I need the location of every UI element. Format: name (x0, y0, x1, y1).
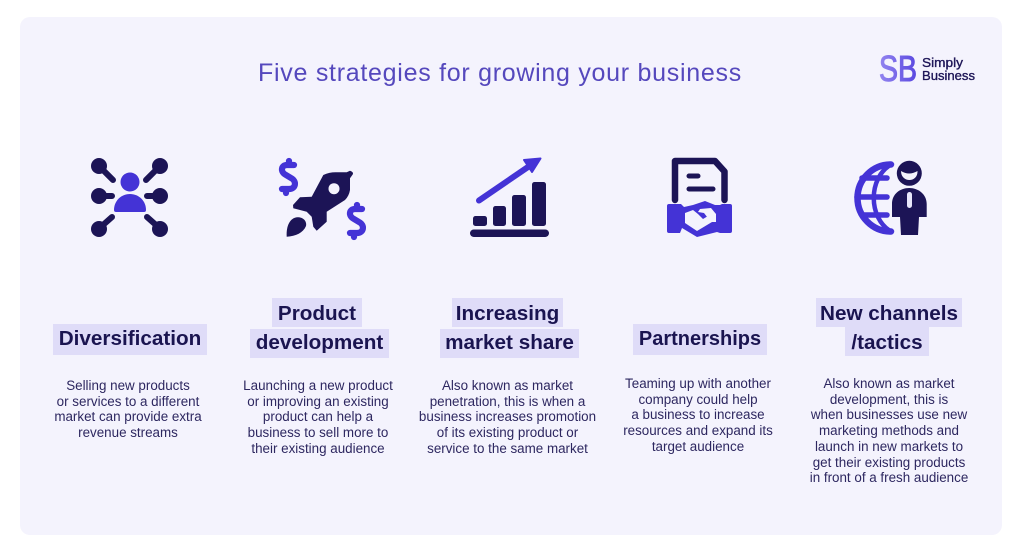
text: New channels /tactics (810, 376, 968, 485)
text: Diversification (54, 378, 202, 440)
heading line 2 (845, 327, 929, 356)
text: Diversification: market can provide extra (54, 409, 202, 424)
text: New channels /tactics: Also known as market (824, 376, 954, 391)
text: Product development: Launching a new product (243, 378, 393, 393)
heading line 2: market share (445, 331, 574, 354)
heading: Partnerships (633, 324, 767, 355)
text: Diversification: revenue streams (78, 425, 178, 440)
text: New channels /tactics: when businesses use new (811, 407, 967, 422)
heading line 1 (272, 298, 362, 327)
logo: Simply Business: Simply (922, 55, 964, 70)
text: Diversification: Selling new products (66, 378, 190, 393)
text: Partnerships: a business to increase (631, 407, 765, 422)
heading line 2: development (256, 331, 383, 354)
text: Product development: their existing audience (251, 441, 385, 456)
heading line 1: Increasing (456, 302, 559, 325)
text: Diversification: or services to a different (57, 394, 199, 409)
heading line 1: New channels (820, 302, 958, 325)
heading line 2: /tactics (851, 331, 923, 354)
text: Increasing market share: of its existing product or (437, 425, 578, 440)
text: Increasing market share: business increases promotion (419, 409, 596, 424)
text: Partnerships: Teaming up with another (625, 376, 771, 391)
text: Product development: or improving an existing (247, 394, 389, 409)
text: Product development: product can help a (263, 409, 373, 424)
heading line 1: Product (278, 302, 356, 325)
text: New channels /tactics: in front of a fresh audience (810, 470, 968, 485)
text: New channels /tactics: launch in new markets to (815, 439, 963, 454)
text: New channels /tactics: get their existing products (813, 455, 965, 470)
text: Product development (243, 378, 393, 456)
logo: Simply Business: SB (879, 48, 917, 89)
text: Increasing market share: Also known as market (442, 378, 573, 393)
heading: Increasing market share (440, 298, 579, 358)
text: Partnerships (623, 376, 773, 454)
text: Increasing market share (419, 378, 596, 456)
text: Increasing market share: service to the same market (427, 441, 588, 456)
text: New channels /tactics: marketing methods and (819, 423, 959, 438)
logo: Simply Business: Business (922, 68, 976, 83)
text: Partnerships: company could help (638, 392, 758, 407)
text: New channels /tactics: development, this is (830, 392, 948, 407)
heading: Diversification: Diversification (59, 327, 201, 350)
text: Partnerships: resources and expand its (623, 423, 773, 438)
text: Partnerships: target audience (652, 439, 744, 454)
heading: Diversification (53, 324, 207, 355)
text: Increasing market share: penetration, this is when a (430, 394, 585, 409)
heading: Partnerships: Partnerships (639, 328, 761, 350)
heading: Product development (250, 298, 389, 358)
title: Five strategies for growing your business (258, 59, 742, 87)
text: Product development: business to sell more to (248, 425, 388, 440)
heading: New channels /tactics (816, 298, 962, 356)
